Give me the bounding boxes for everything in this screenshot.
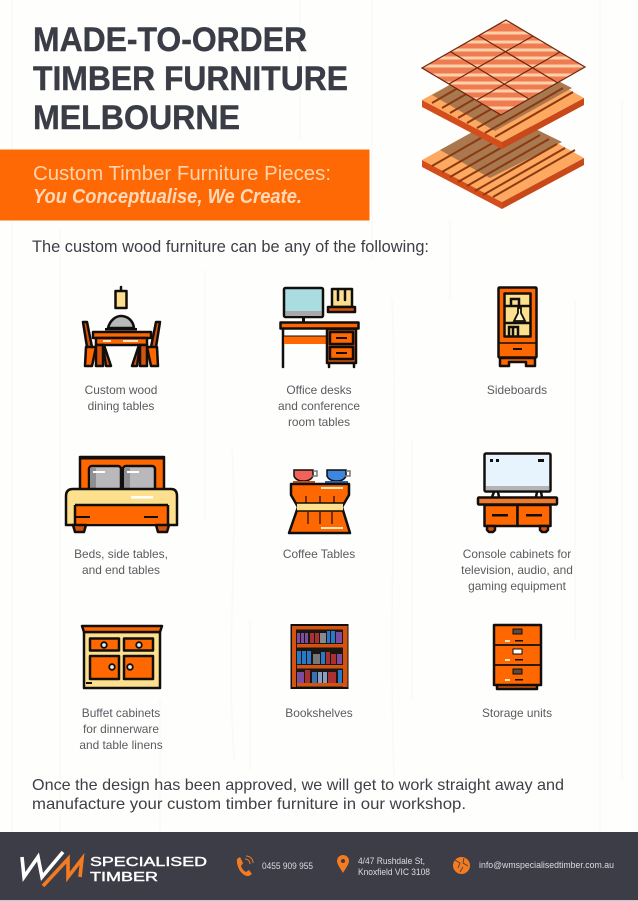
label: Coffee Tables — [283, 547, 355, 561]
label: Sideboards — [487, 383, 547, 397]
icon: bookshelf — [292, 625, 348, 688]
item: storage units — [482, 625, 552, 720]
item: office desks — [278, 288, 360, 429]
label: gaming equipment — [468, 579, 567, 593]
label: dining tables — [88, 399, 154, 413]
item: coffee tables — [283, 470, 355, 561]
banner: subtitle: Custom Timber Furniture Pieces: — [33, 163, 331, 185]
contact: address — [337, 855, 430, 878]
label: Office desks — [286, 383, 352, 397]
title: MELBOURNE — [33, 99, 240, 137]
item: beds — [66, 456, 177, 577]
contact: phone: 0455 909 955 — [262, 861, 313, 872]
label: Buffet cabinets — [82, 706, 160, 720]
label: Beds, side tables, — [74, 547, 168, 561]
bottom layer — [422, 114, 584, 209]
contact: address: 4/47 Rushdale St, — [358, 856, 425, 867]
label: and table linens — [79, 738, 163, 752]
item: sideboards — [487, 288, 547, 397]
contact: address: Knoxfield VIC 3108 — [358, 867, 430, 878]
icon: sideboard — [498, 288, 537, 366]
icon: buffet cabinet — [82, 626, 162, 688]
label: room tables — [288, 415, 350, 429]
item: console cabinets — [461, 454, 573, 593]
label: and end tables — [82, 563, 160, 577]
closing text: Once the design has been approved, we will get to work straight away and — [32, 777, 564, 794]
label: and conference — [278, 399, 360, 413]
middle layer — [422, 54, 584, 149]
closing text: manufacture your custom timber furniture in our workshop. — [32, 796, 466, 813]
banner: subtitle: You Conceptualise, We Create. — [33, 186, 302, 208]
label: television, audio, and — [461, 563, 573, 577]
logo: SPECIALISED — [90, 855, 207, 869]
logo: TIMBER — [90, 870, 158, 884]
top tiled layer — [420, 20, 590, 115]
icon: office desk — [280, 288, 358, 367]
label: Console cabinets for — [463, 547, 571, 561]
icon: stacked timber layers — [420, 20, 590, 209]
icon: bed — [66, 456, 177, 532]
item: buffet cabinets — [79, 626, 163, 752]
contact: email: info@wmspecialisedtimber.com.au — [479, 860, 614, 871]
icon: storage unit — [494, 625, 541, 689]
title: MADE-TO-ORDER — [33, 21, 307, 59]
icon: coffee table — [289, 470, 350, 533]
contact: phone — [237, 856, 313, 876]
item: dining tables — [83, 287, 160, 413]
footer — [0, 832, 638, 901]
contact: email — [453, 857, 614, 874]
label: Bookshelves — [285, 706, 353, 720]
label: for dinnerware — [83, 722, 159, 736]
closing text — [32, 777, 564, 813]
icon: console cabinet — [478, 454, 557, 532]
intro text: The custom wood furniture can be any of the following: — [32, 238, 429, 256]
label: Storage units — [482, 706, 552, 720]
title — [33, 21, 348, 137]
banner: subtitle — [0, 150, 370, 220]
icon: dining table — [83, 287, 160, 366]
label: Custom wood — [85, 383, 157, 397]
title: TIMBER FURNITURE — [33, 60, 348, 98]
logo — [22, 852, 207, 886]
item: bookshelves — [285, 625, 353, 720]
